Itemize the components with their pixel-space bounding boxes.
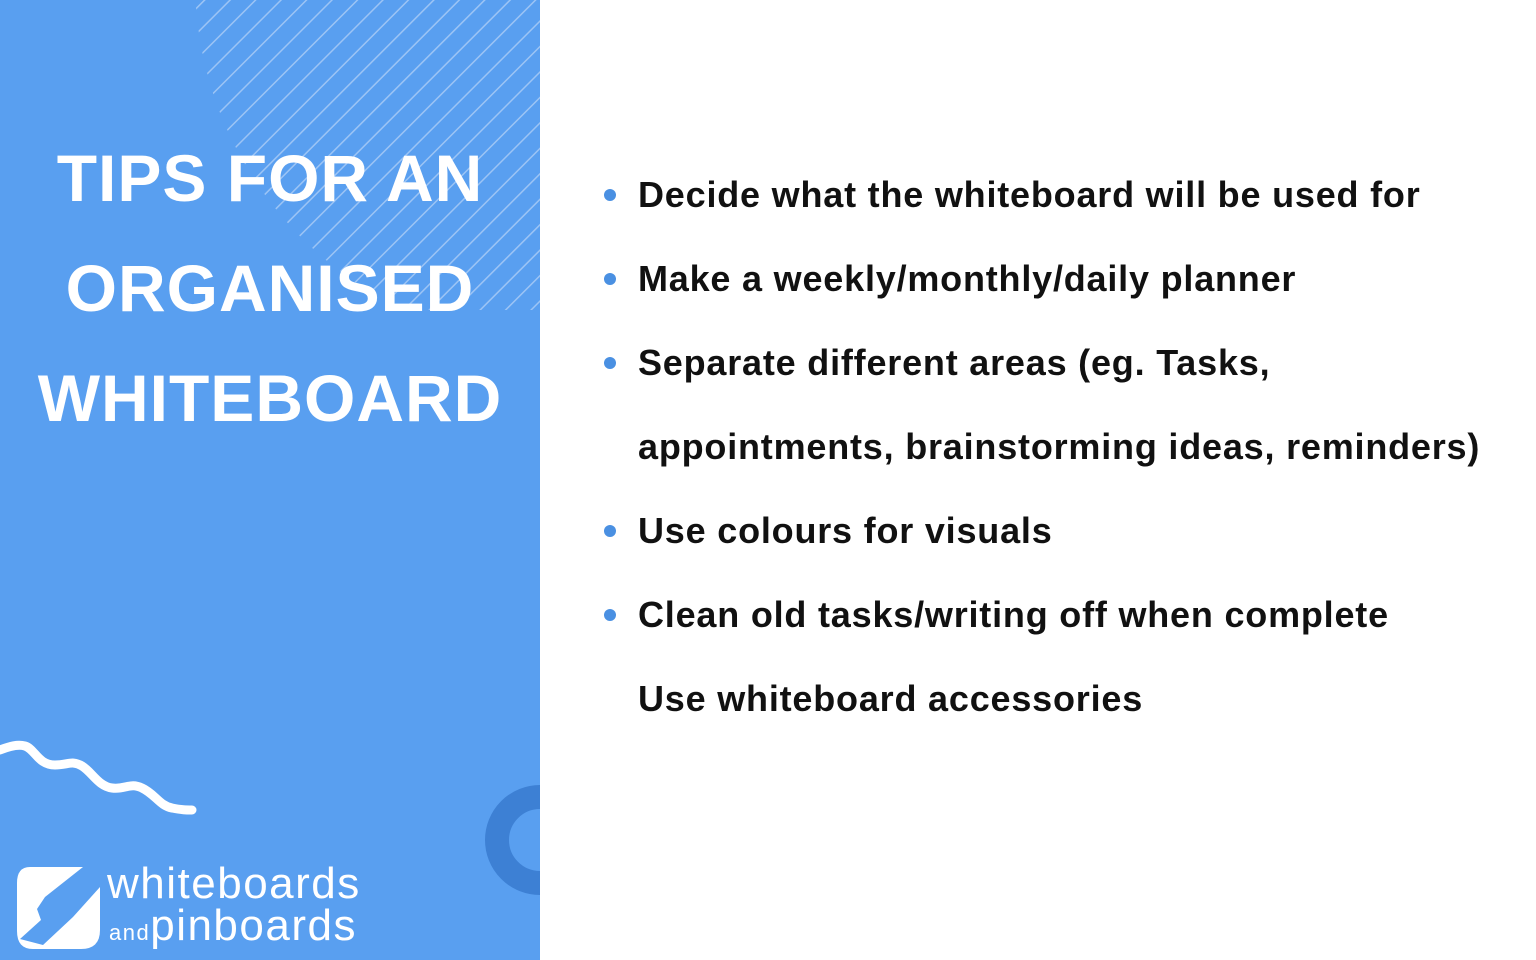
panel: blue left (0, 0, 540, 960)
title: TIPS FOR AN (57, 141, 483, 215)
decoration: ring (485, 785, 540, 895)
bullet list (604, 174, 1480, 719)
item 1: Decide what the whiteboard will be used for (638, 174, 1421, 215)
logo text: whiteboards (107, 859, 361, 908)
logo: andpinboards (109, 901, 357, 950)
logo (17, 859, 361, 950)
item 3 continued: appointments, brainstorming ideas, reminders) (638, 426, 1480, 467)
item 6: Use whiteboard accessories (638, 678, 1143, 719)
stripe pattern (196, 0, 540, 310)
title: ORGANISED (66, 251, 474, 325)
item 4: Use colours for visuals (638, 510, 1053, 551)
item 3: Separate different areas (eg. Tasks, (638, 342, 1270, 383)
decoration: squiggle (0, 740, 196, 814)
item 2: Make a weekly/monthly/daily planner (638, 258, 1296, 299)
title: WHITEBOARD (38, 361, 502, 435)
icon: marker (17, 867, 100, 949)
title (38, 141, 502, 435)
item 5: Clean old tasks/writing off when complete (638, 594, 1389, 635)
